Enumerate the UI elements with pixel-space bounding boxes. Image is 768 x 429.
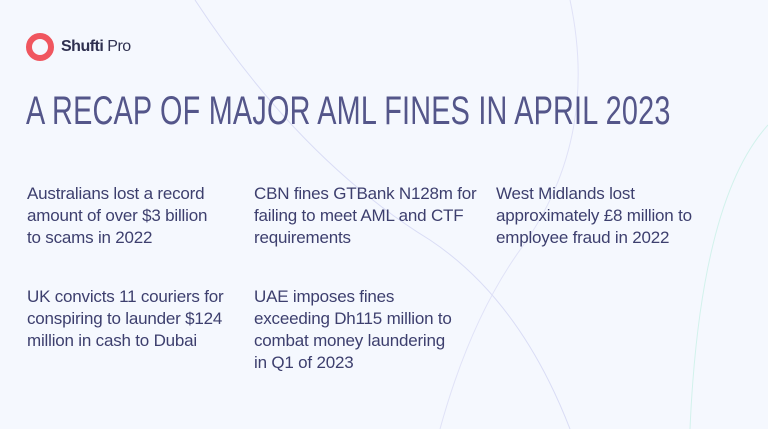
icon: logo ring (26, 33, 54, 61)
text: West Midlands: approximately £8 million to (496, 206, 692, 225)
title: A RECAP OF MAJOR AML FINES IN APRIL 2023 (26, 89, 671, 133)
text: UAE (254, 287, 452, 372)
text: UAE: exceeding Dh115 million to (254, 309, 452, 328)
text: UK (27, 287, 224, 350)
text: West Midlands (496, 184, 692, 247)
text: CBN: CBN fines GTBank N128m for (254, 184, 476, 203)
logo (26, 33, 131, 61)
text: UK: conspiring to launder $124 (27, 309, 222, 328)
text: West Midlands: West Midlands lost (496, 184, 635, 203)
text: West Midlands: employee fraud in 2022 (496, 228, 669, 247)
text: UAE: combat money laundering (254, 331, 445, 350)
text: Australians: to scams in 2022 (27, 228, 152, 247)
text: CBN: failing to meet AML and CTF (254, 206, 463, 225)
text: UAE: in Q1 of 2023 (254, 353, 353, 372)
logo text: Shufti Pro (61, 38, 131, 55)
text: UAE: UAE imposes fines (254, 287, 394, 306)
text: CBN (254, 184, 476, 247)
text: Australians: amount of over $3 billion (27, 206, 207, 225)
text: CBN: requirements (254, 228, 351, 247)
text: Australians (27, 184, 207, 247)
text: Australians: Australians lost a record (27, 184, 204, 203)
text: UK: million in cash to Dubai (27, 331, 197, 350)
text: UK: UK convicts 11 couriers for (27, 287, 223, 306)
